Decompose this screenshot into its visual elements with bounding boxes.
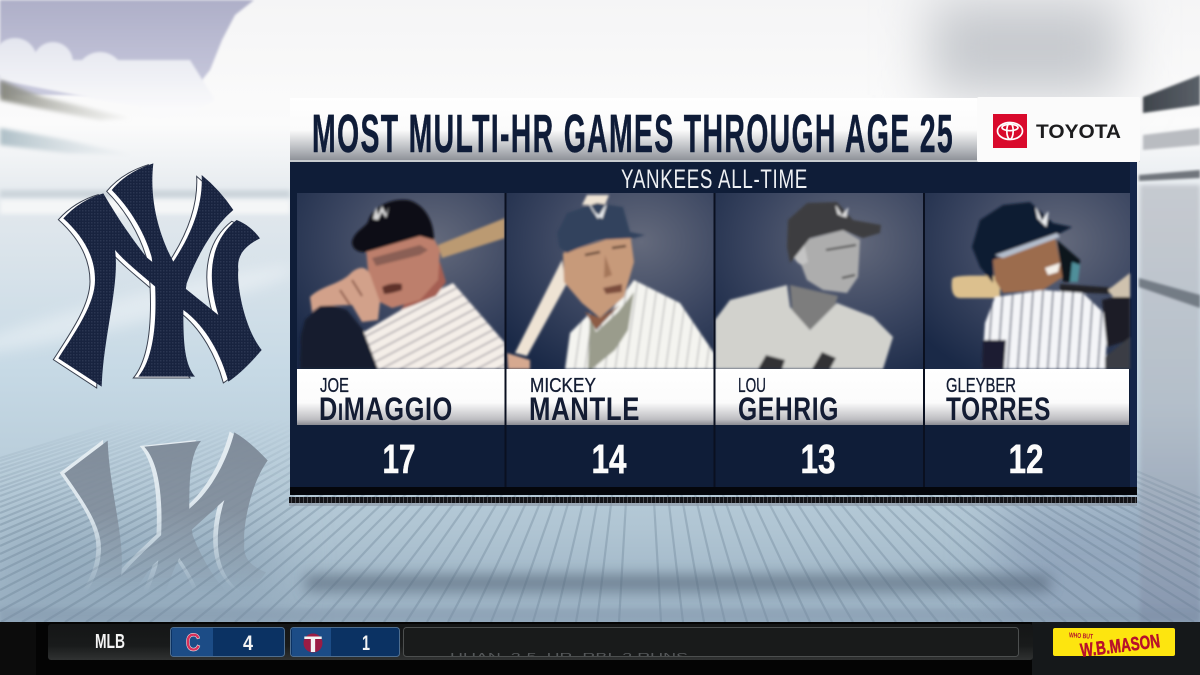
ticker message box: HUAN, 2-5, HR, RBI, 2 RUNS: [450, 652, 689, 663]
name: Mickey Mantle: MICKEY: [530, 374, 596, 397]
panel: navy body: [290, 162, 1137, 495]
score: Cleveland 4: C: [186, 629, 200, 657]
column: Lou Gehrig: [715, 193, 923, 482]
score: Cleveland 4: [170, 628, 284, 657]
name: Gleyber Torres: [925, 369, 1129, 427]
score: Minnesota 1: 1: [362, 632, 370, 655]
bottom chain strip: [289, 497, 1137, 503]
photo: Lou Gehrig: [715, 193, 923, 369]
name: Mickey Mantle: [506, 369, 714, 427]
sponsor: W.B. Mason: W.B.MASON: [1079, 631, 1161, 662]
name: Lou Gehrig: LOU: [738, 374, 766, 397]
column: Joe DiMaggio: [297, 193, 505, 482]
column: Gleyber Torres: [925, 193, 1130, 482]
score: Cleveland 4: 4: [243, 632, 253, 655]
sponsor: Toyota logo: [977, 97, 1140, 162]
name: Mickey Mantle: MANTLE: [529, 391, 640, 427]
ticker bar: [0, 622, 1200, 675]
name: Joe DiMaggio: [297, 369, 505, 427]
score: Minnesota 1: T: [304, 632, 323, 657]
value: 14: 14: [592, 436, 627, 482]
sponsor: W.B. Mason: [1053, 628, 1175, 662]
photo: Mickey Mantle: [506, 193, 714, 369]
value: 17: 17: [382, 436, 416, 482]
column: Mickey Mantle: [506, 193, 714, 482]
subheading: YANKEES ALL-TIME: [621, 164, 808, 194]
score: Minnesota 1: [290, 628, 400, 657]
value: 13: 13: [800, 436, 836, 482]
league label: MLB: [95, 631, 125, 653]
sponsor: W.B. Mason: WHO BUT: [1069, 632, 1094, 641]
name: Gleyber Torres: GLEYBER: [946, 374, 1016, 397]
sponsor: Toyota logo: TOYOTA: [1036, 121, 1121, 143]
ticker message box: [403, 627, 1019, 657]
name: Lou Gehrig: GEHRIG: [738, 391, 839, 427]
value: 12: 12: [1008, 436, 1044, 482]
photo: Gleyber Torres: [925, 193, 1130, 369]
name: Joe DiMaggio: DIMAGGIO: [319, 391, 453, 427]
name: Lou Gehrig: [715, 369, 923, 427]
name: Gleyber Torres: TORRES: [946, 391, 1051, 427]
photo: Joe DiMaggio: [297, 193, 505, 369]
icon: Yankees NY logo: [53, 163, 262, 388]
icon: faded logo reflection: [60, 432, 268, 584]
panel: graphic board: [289, 97, 1140, 506]
name: Joe DiMaggio: JOE: [320, 374, 349, 397]
